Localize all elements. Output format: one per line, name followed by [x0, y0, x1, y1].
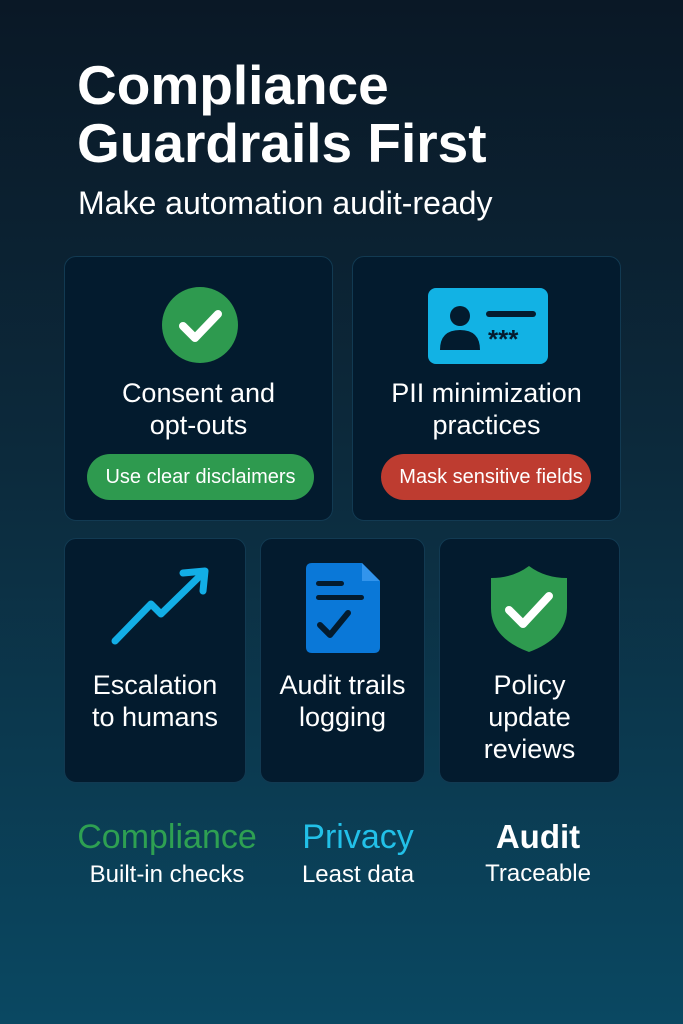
- stat: privacy: Privacy: [302, 818, 414, 856]
- title: [77, 54, 487, 174]
- pill: [381, 454, 591, 500]
- stat: privacy: Least data: [302, 861, 414, 888]
- stat: audit: [485, 818, 591, 887]
- panel: escalation: [64, 538, 246, 783]
- subtitle: Make automation audit-ready: [78, 185, 492, 221]
- stat: audit: Traceable: [485, 860, 591, 887]
- icon: trend arrow: [112, 568, 208, 644]
- stat: compliance: Built-in checks: [90, 861, 244, 888]
- heading: reviews: [484, 734, 575, 764]
- stat: compliance: Compliance: [77, 818, 257, 856]
- icon: ID card: ***: [488, 324, 519, 354]
- pill: [87, 454, 314, 500]
- panel: audit: [260, 538, 425, 783]
- pill: Mask sensitive fields: [399, 466, 583, 488]
- title: Guardrails First: [77, 112, 487, 174]
- stat: audit: Audit: [496, 818, 580, 855]
- heading: [484, 670, 575, 764]
- heading: Policy: [493, 670, 566, 700]
- heading: [391, 378, 582, 440]
- heading: to humans: [92, 702, 218, 732]
- heading: practices: [432, 410, 541, 440]
- pill: Use clear disclaimers: [105, 466, 296, 488]
- icon: green check circle: [162, 287, 238, 363]
- heading: logging: [299, 702, 386, 732]
- stat: privacy: [302, 818, 414, 888]
- heading: Escalation: [93, 670, 217, 700]
- heading: [279, 670, 406, 732]
- icon: ID card: [428, 288, 548, 364]
- heading: update: [488, 702, 571, 732]
- title: Compliance: [77, 54, 389, 116]
- panel: PII: [352, 256, 621, 521]
- heading: Audit trails: [279, 670, 406, 700]
- heading: [122, 378, 275, 440]
- panel: consent: [64, 256, 333, 521]
- stat: compliance: [77, 818, 257, 888]
- heading: [92, 670, 218, 732]
- heading: Consent and: [122, 378, 275, 408]
- panel: policy: [439, 538, 620, 783]
- heading: opt-outs: [150, 410, 247, 440]
- icon: shield check: [491, 566, 567, 652]
- icon: document check: [306, 563, 380, 653]
- heading: PII minimization: [391, 378, 582, 408]
